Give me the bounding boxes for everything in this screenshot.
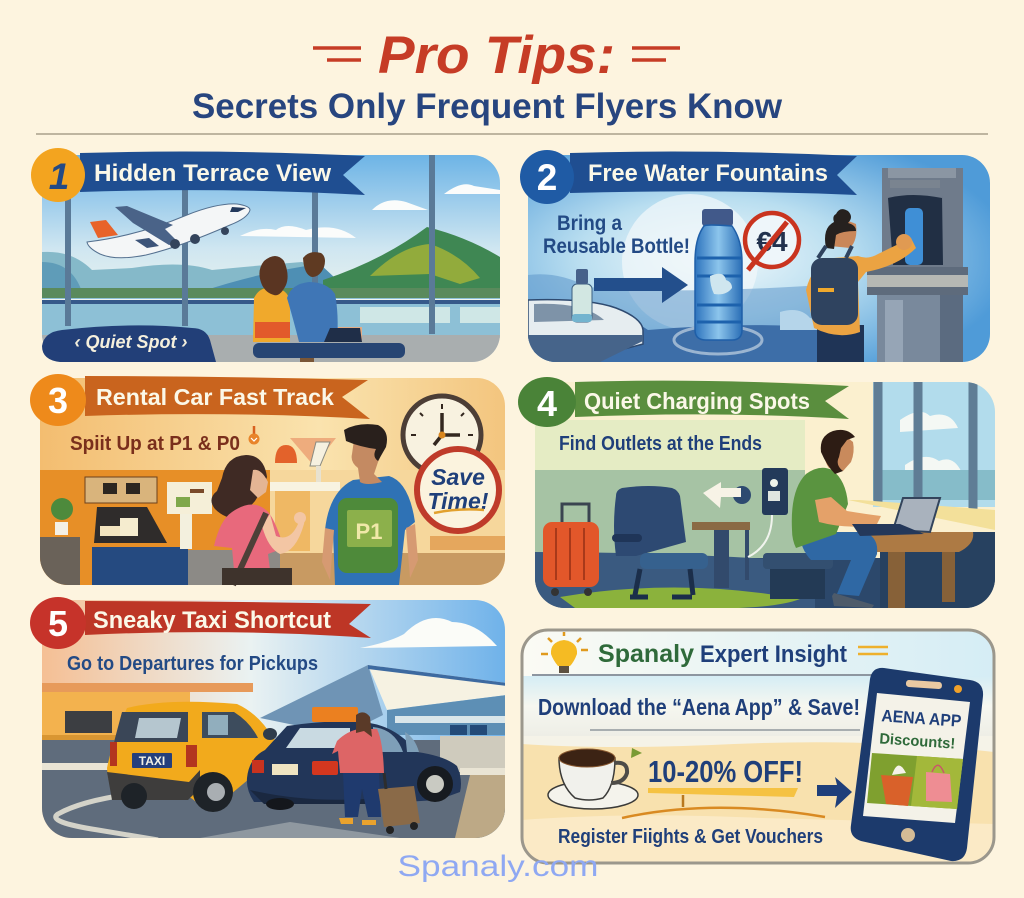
panel: rental car fast track — [30, 374, 505, 585]
icon: down arrow — [248, 426, 260, 444]
number badge 2 — [520, 150, 574, 204]
badge: save time — [417, 449, 499, 531]
illustration: suitcase — [543, 504, 599, 596]
banner: heading 1 — [31, 148, 365, 202]
illustration: man with laptop — [763, 430, 973, 608]
banner: heading 3 — [30, 374, 370, 426]
illustration: phone — [851, 668, 983, 861]
number badge 4: 4 — [537, 383, 557, 424]
panel: expert insight — [522, 630, 994, 863]
banner: heading 5: Sneaky Taxi Shortcut — [93, 607, 331, 634]
badge: save time: Time! — [428, 488, 489, 514]
number badge 5: 5 — [48, 603, 68, 644]
text: register flights: Register Fiights & Get Vouchers — [558, 826, 823, 848]
illustration: taxi — [107, 702, 280, 812]
badge: save time: Save — [431, 464, 485, 490]
illustration: dark car — [247, 707, 461, 810]
illustration: big bottle — [695, 209, 742, 340]
illustration: traveller — [806, 209, 916, 362]
number badge 4 — [518, 377, 576, 427]
number badge 2: 2 — [537, 157, 557, 198]
arrow — [817, 777, 852, 808]
number badge 3 — [30, 374, 86, 426]
text: download the aena app: Download the “Aena App” & Save! — [538, 694, 860, 720]
panel: sneaky taxi shortcut — [30, 597, 507, 840]
text: bring a reusable bottle: Bring a — [557, 212, 622, 235]
banner: heading 4: Quiet Charging Spots — [584, 388, 810, 414]
arrow — [594, 267, 688, 303]
illustration: woman — [211, 455, 306, 585]
illustration: man with P1 backpack: P1 — [356, 519, 382, 544]
icon: no 4 euro — [745, 213, 799, 270]
illustration: couple on bench — [253, 252, 405, 362]
banner: heading 3: Rental Car Fast Track — [96, 384, 335, 410]
illustration: sink — [528, 300, 643, 363]
panel: hidden terrace view — [31, 148, 500, 362]
icon: light bulb — [541, 632, 588, 673]
illustration: chair — [612, 486, 708, 597]
number badge 5 — [30, 597, 86, 649]
heading: spanaly expert insight: Spanaly — [598, 640, 694, 668]
number badge 3: 3 — [48, 380, 68, 421]
illustration: woman with suitcase — [332, 712, 420, 834]
banner: heading 4 — [518, 377, 849, 427]
banner: heading 1: Hidden Terrace View — [94, 160, 332, 187]
text: bring a reusable bottle — [543, 212, 690, 258]
illustration: phone: Discounts! — [879, 730, 956, 753]
illustration: side table — [692, 522, 750, 588]
icon: plug and outlet — [703, 468, 788, 557]
illustration: fountain — [867, 168, 968, 362]
badge: quiet spot — [42, 325, 216, 362]
text: bring a reusable bottle: Reusable Bottle! — [543, 235, 690, 258]
illustration: phone: AENA APP — [881, 706, 962, 731]
title: Secrets Only Frequent Flyers Know — [192, 87, 783, 126]
text: 10-20% off: 10-20% OFF! — [648, 754, 803, 789]
icon: no 4 euro: €4 — [756, 226, 788, 257]
text: split up: Spiit Up at P1 & P0 — [70, 433, 240, 455]
illustration: small bottle — [572, 269, 592, 322]
title — [192, 26, 783, 126]
illustration: taxi: TAXI — [139, 754, 165, 768]
illustration: coffee cup — [548, 748, 642, 809]
number badge 1 — [31, 148, 85, 202]
panel: quiet charging spots — [518, 377, 995, 609]
heading: spanaly expert insight — [598, 640, 888, 668]
illustration: man with P1 backpack — [322, 424, 418, 585]
watermark: spanaly.com: Spanaly.com — [398, 850, 598, 883]
icon: clock — [403, 396, 481, 474]
banner: heading 2 — [520, 150, 857, 204]
icon: airplane — [87, 204, 250, 258]
banner: heading 2: Free Water Fountains — [588, 160, 828, 187]
heading: spanaly expert insight: Expert Insight — [700, 641, 847, 668]
title: Pro Tips: — [378, 26, 615, 85]
banner: heading 5 — [30, 597, 371, 649]
badge: quiet spot: ‹ Quiet Spot › — [75, 332, 187, 352]
text: find outlets: Find Outlets at the Ends — [559, 433, 762, 455]
underline swoosh — [622, 788, 825, 818]
panel: free water fountains — [520, 150, 990, 363]
number badge 1: 1 — [49, 156, 69, 197]
text: go to departures: Go to Departures for Pickups — [67, 653, 318, 675]
